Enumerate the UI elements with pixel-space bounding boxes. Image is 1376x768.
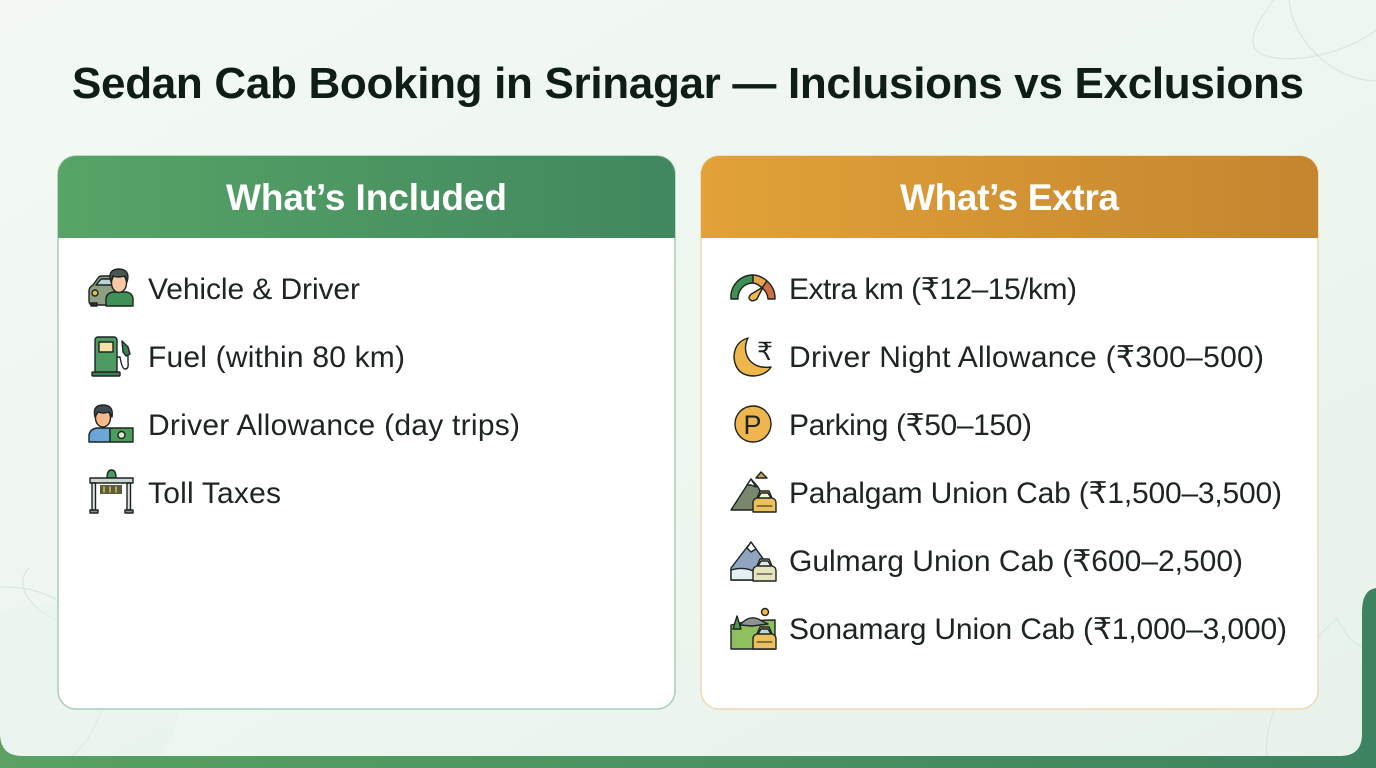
icon: moon and rupee [734, 338, 773, 376]
item: toll taxes: Toll Taxes [148, 477, 281, 510]
icon: mountain and cab [731, 472, 776, 512]
soft bottom-left glow [0, 605, 178, 756]
icon: parking coin: P [744, 410, 762, 440]
item: fuel [92, 337, 405, 376]
panel header [58, 156, 675, 238]
item: toll taxes [90, 470, 281, 513]
icon: snowy mountain and cab [731, 542, 776, 581]
green footer band [0, 588, 1376, 768]
panel: what's extra [701, 156, 1318, 709]
icon: moon and rupee: ₹ [757, 338, 773, 366]
item: parking: Parking (₹50–150) [789, 409, 1032, 442]
item: fuel: Fuel (within 80 km) [148, 341, 405, 374]
icon: fuel pump [92, 337, 130, 376]
icon: toll gate [90, 470, 133, 513]
icon: parking coin [735, 406, 771, 442]
icon: green valley and cab [731, 608, 776, 649]
panel header: What’s Included [226, 177, 507, 218]
item: driver allowance: Driver Allowance (day trips) [148, 409, 520, 442]
title: Sedan Cab Booking in Srinagar — Inclusions vs Exclusions [72, 59, 1304, 108]
item: driver night allowance: Driver Night Allowance (₹300–500) [789, 341, 1264, 374]
item: extra km: Extra km (₹12–15/km) [789, 273, 1077, 306]
panel header [701, 156, 1318, 238]
panel: what's included [58, 156, 675, 709]
panel card [701, 156, 1318, 709]
item: vehicle and driver: Vehicle & Driver [148, 273, 360, 306]
icon: speedometer [731, 275, 775, 301]
item: gulmarg union cab: Gulmarg Union Cab (₹600–2,500) [789, 545, 1243, 578]
panel header: What’s Extra [900, 177, 1119, 218]
icon: driver with cash [89, 405, 133, 442]
item: pahalgam union cab: Pahalgam Union Cab (₹1,500–3,500) [789, 477, 1282, 510]
panel card [58, 156, 675, 709]
item: sonamarg union cab: Sonamarg Union Cab (₹1,000–3,000) [789, 613, 1287, 646]
item: vehicle and driver [89, 269, 360, 306]
icon: car and driver [89, 269, 133, 306]
